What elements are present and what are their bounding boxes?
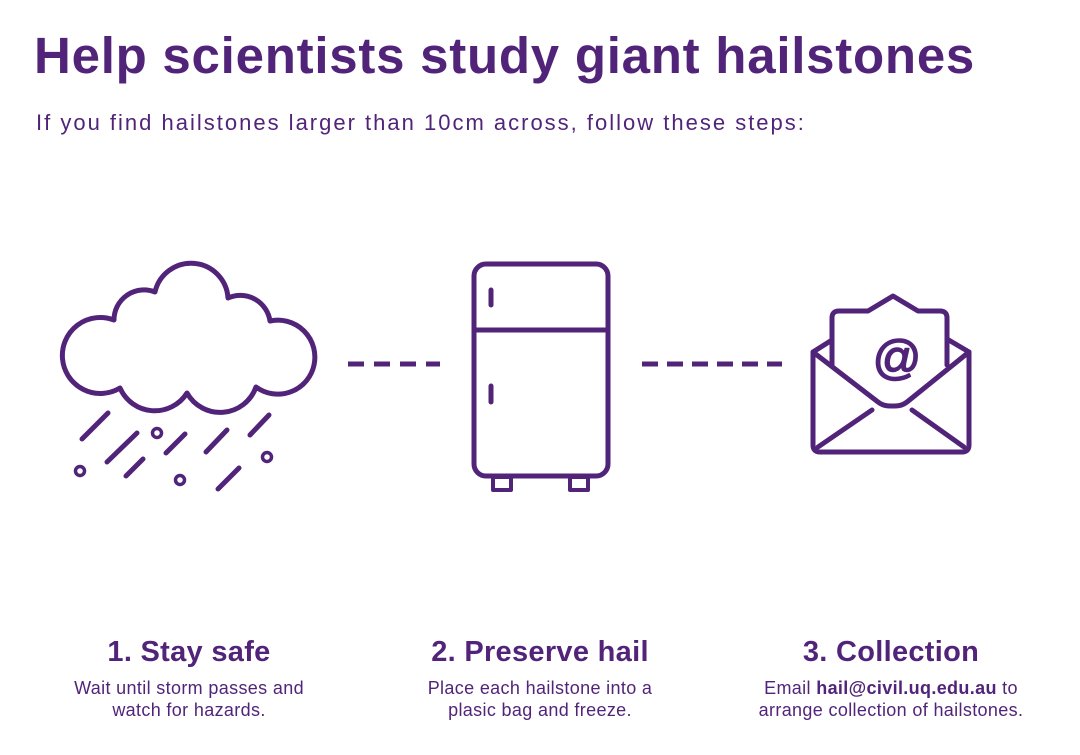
step 1: watch for hazards. xyxy=(112,700,266,720)
icon: hail cloud xyxy=(62,263,315,489)
step 1: 1. Stay safe xyxy=(107,636,271,668)
step 2: plasic bag and freeze. xyxy=(448,700,632,720)
step 2: Place each hailstone into a xyxy=(428,678,652,698)
subtitle: If you find hailstones larger than 10cm across, follow these steps: xyxy=(36,110,806,135)
step 3 xyxy=(759,636,1023,720)
icon: email envelope xyxy=(813,296,969,452)
step 1: Wait until storm passes and xyxy=(74,678,304,698)
arrow: dashes 2 xyxy=(642,362,782,366)
step 3: 3. Collection xyxy=(803,636,979,668)
arrow: dashes 1 xyxy=(348,362,440,366)
icon: fridge xyxy=(474,264,608,490)
title: Help scientists study giant hailstones xyxy=(34,27,975,84)
step 3: arrange collection of hailstones. xyxy=(759,700,1023,720)
icon: email envelope: @ xyxy=(873,332,921,385)
step 2: 2. Preserve hail xyxy=(431,636,649,668)
step 1 xyxy=(74,636,304,720)
step 2 xyxy=(428,636,652,720)
step 3: Email hail@civil.uq.edu.au to xyxy=(764,678,1018,698)
